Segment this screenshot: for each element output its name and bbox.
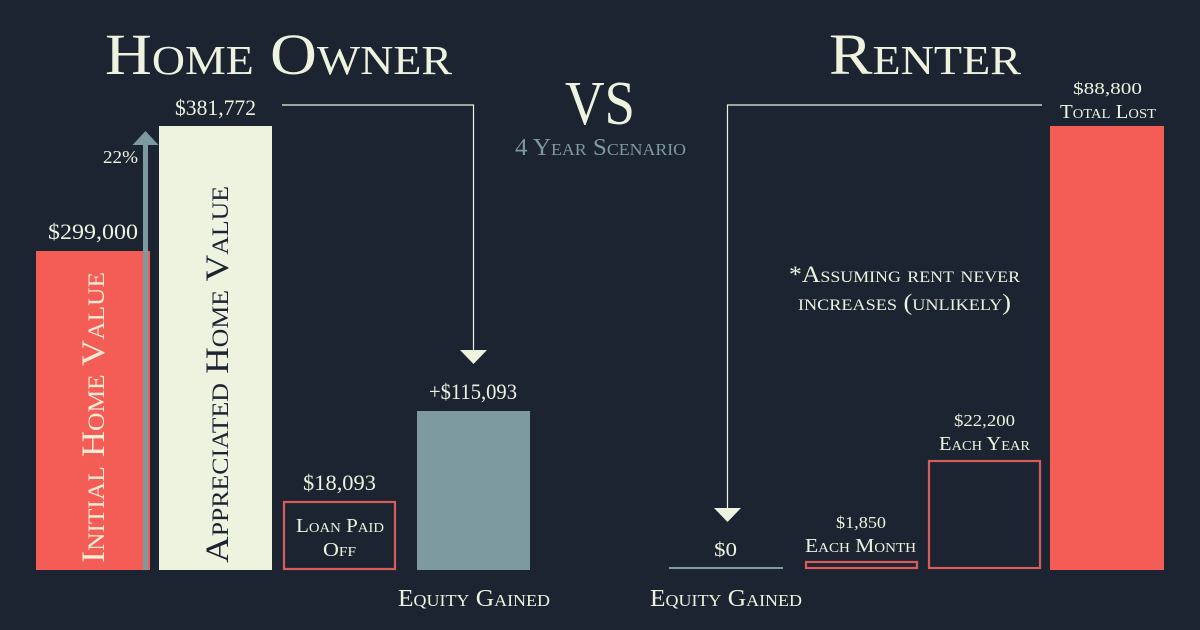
- value: 22,200 each year: Each Year: [939, 433, 1031, 455]
- bar label: initial home value: Initial Home Value: [76, 272, 112, 563]
- subtitle: 4 year scenario: 4 Year Scenario: [515, 135, 686, 161]
- value: 1,850 each month: Each Month: [805, 535, 916, 557]
- arrow: appreciation to equity: [282, 105, 487, 364]
- percent: 22%: 22%: [103, 147, 138, 167]
- value: 88,800 total lost: Total Lost: [1060, 101, 1156, 123]
- title: vs: VS: [565, 70, 635, 138]
- arrow: total lost to equity: [714, 105, 1042, 522]
- label: equity gained owner: Equity Gained: [398, 586, 550, 612]
- title: home owner: Home Owner: [105, 22, 453, 87]
- value: 115,093: +$115,093: [429, 379, 517, 404]
- value: 381,772: $381,772: [175, 95, 256, 120]
- bar label: appreciated home value: Appreciated Home Value: [200, 186, 236, 563]
- arrow: 22% increase: [132, 131, 158, 570]
- box label: Loan Paid: [296, 515, 384, 537]
- label: equity gained renter: Equity Gained: [650, 586, 802, 612]
- note: rent assumption: *Assuming rent never: [789, 262, 1020, 287]
- bar: appreciated home value: [159, 126, 272, 570]
- value: $0: $0: [714, 539, 737, 561]
- value: 299,000: $299,000: [48, 219, 138, 244]
- note: rent assumption: [789, 262, 1020, 315]
- value: 22,200 each year: $22,200: [954, 411, 1015, 430]
- value: 1,850 each month: $1,850: [836, 513, 886, 532]
- value: 88,800 total lost: $88,800: [1073, 79, 1142, 98]
- bar: equity gained: [417, 411, 530, 570]
- bar: initial home value: [36, 251, 150, 570]
- title: renter: Renter: [829, 22, 1022, 87]
- box: each month: [806, 562, 917, 568]
- box: loan paid off: [284, 502, 395, 569]
- box: each year: [929, 461, 1040, 568]
- bar: renter equity line: [669, 567, 783, 569]
- note: rent assumption: increases (unlikely): [798, 290, 1011, 315]
- bar: total lost: [1050, 126, 1164, 570]
- box: loan paid off: Off: [323, 539, 356, 561]
- value: 88,800 total lost: [1060, 79, 1156, 123]
- value: 1,850 each month: [805, 513, 916, 557]
- value: 18,093: $18,093: [303, 470, 376, 495]
- value: 22,200 each year: [939, 411, 1031, 455]
